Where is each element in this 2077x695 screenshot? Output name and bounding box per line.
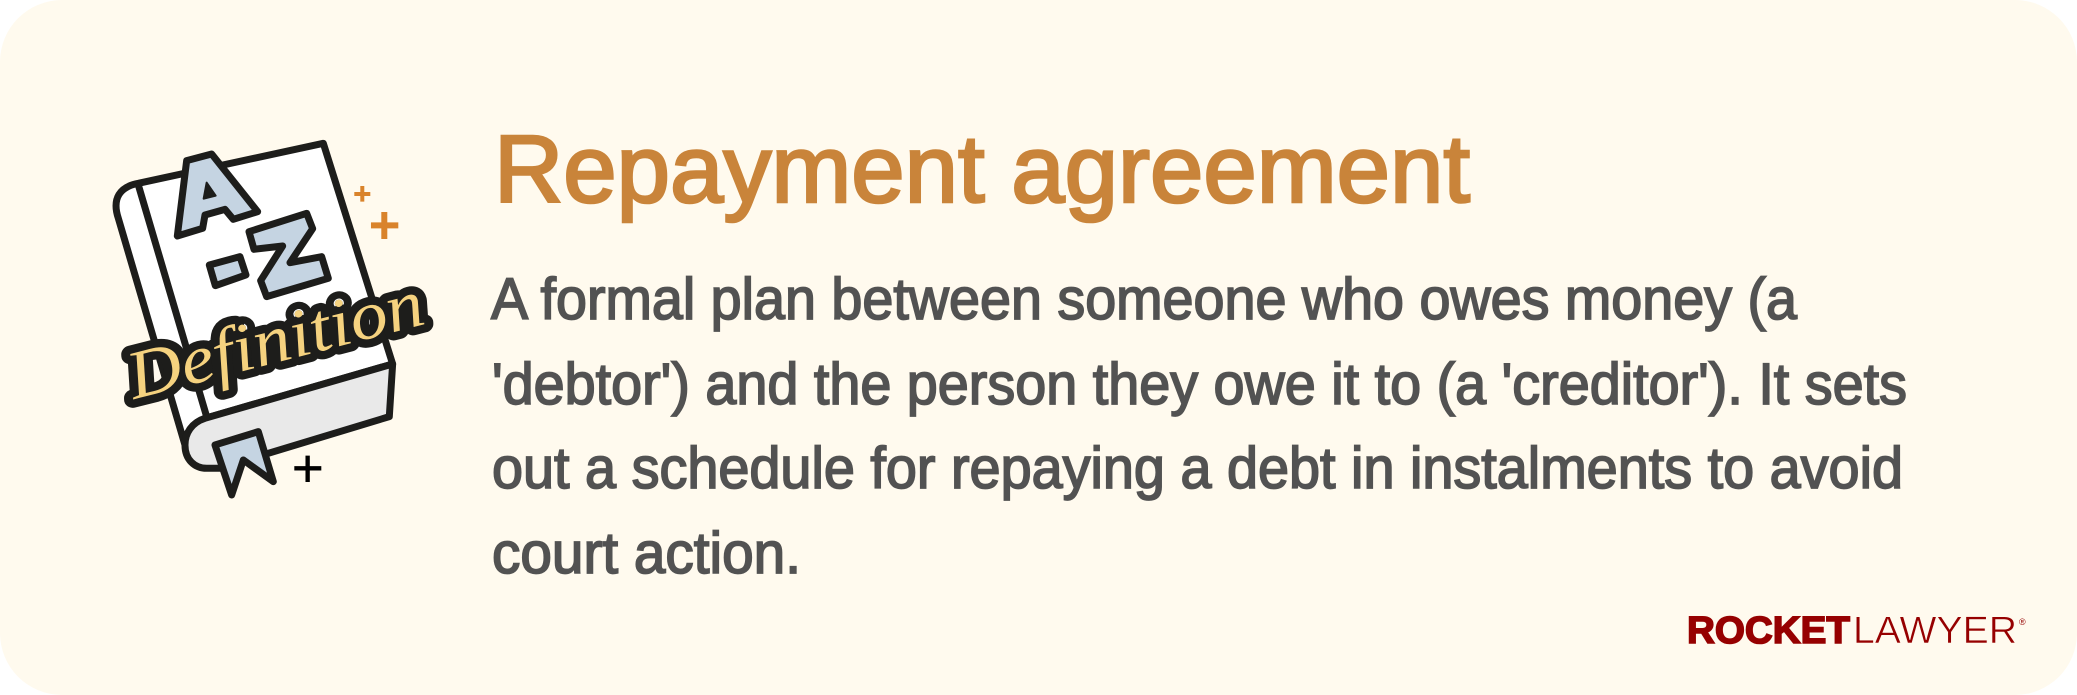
icon: letter A counter bbox=[204, 183, 216, 199]
icon: letter Z bbox=[249, 213, 328, 297]
body text bbox=[491, 267, 1907, 586]
icon: A-Z definition book bbox=[116, 143, 431, 495]
script word outline: Definition bbox=[118, 264, 431, 414]
icon: orange small plus bbox=[354, 186, 370, 202]
logo: Rocket Lawyer bbox=[1687, 610, 2026, 652]
body line 4: court action. bbox=[492, 521, 801, 586]
logo registered mark: ® bbox=[2019, 617, 2026, 627]
script word: Definition bbox=[118, 264, 431, 414]
icon: bookmark bbox=[215, 432, 273, 495]
icon: book spine line bbox=[138, 185, 207, 417]
body line 1: A formal plan between someone who owes money (a bbox=[491, 267, 1798, 332]
icon: book cover bbox=[116, 143, 393, 445]
script word fill: Definition bbox=[118, 264, 431, 414]
body line 3: out a schedule for repaying a debt in instalments to avoid bbox=[492, 436, 1903, 501]
icon: letter A bbox=[177, 154, 258, 236]
body line 2: 'debtor') and the person they owe it to (a 'creditor'). It sets bbox=[492, 352, 1907, 417]
logo word LAWYER: LAWYER bbox=[1853, 610, 2017, 652]
icon: book pages bbox=[185, 364, 393, 468]
icon: orange large plus bbox=[371, 212, 398, 239]
title: Repayment agreement bbox=[494, 116, 1470, 223]
logo word ROCKET: ROCKET bbox=[1687, 610, 1850, 652]
icon: black plus bbox=[294, 456, 321, 482]
icon: dash bbox=[209, 257, 246, 286]
